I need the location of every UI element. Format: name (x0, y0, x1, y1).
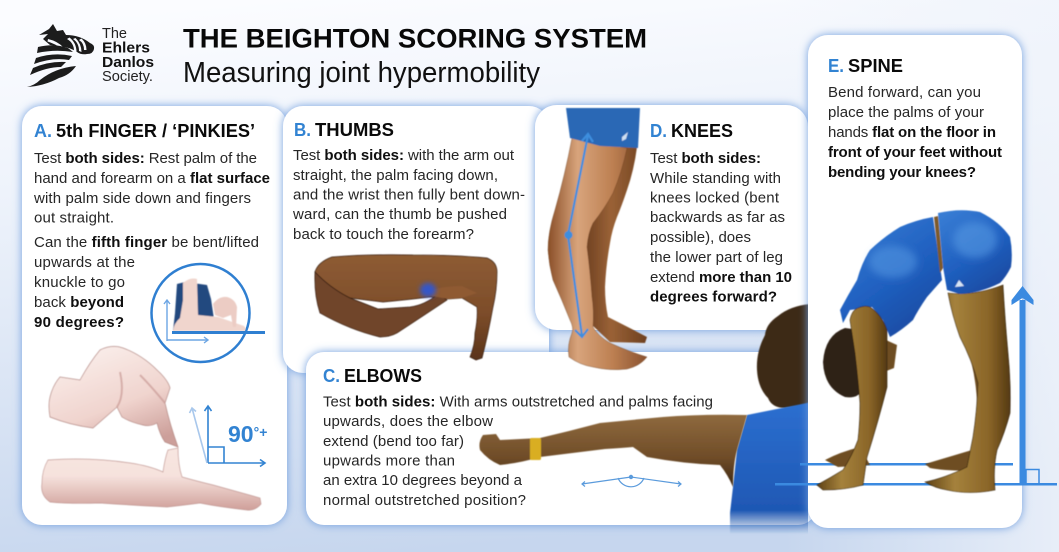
text block: B instructions: Test both sides: with the arm out (293, 147, 515, 164)
text block: D instructions (650, 150, 792, 306)
text block: A instructions (33, 150, 270, 331)
heading: D: KNEES (671, 120, 733, 141)
heading: D: D. (650, 120, 667, 141)
text block: C instructions: upwards more than (323, 452, 455, 470)
text block: E instructions: bending your knees? (828, 164, 976, 181)
text block: B instructions: and the wrist then fully bent down- (293, 186, 525, 204)
forearm (884, 340, 897, 372)
text block: D instructions: backwards as far as (650, 209, 785, 226)
heading: A: 5th FINGER / ‘PINKIES’ (56, 120, 255, 141)
text block: A instructions: Test both sides: Rest palm of the (34, 150, 257, 167)
text block: A instructions: out straight. (34, 210, 114, 226)
panel: E. spine (808, 35, 1022, 528)
icon: 90 degree angle (190, 406, 267, 466)
text block: C instructions: an extra 10 degrees beyond a (323, 472, 523, 489)
front arm and hand (817, 306, 887, 490)
text block: D instructions: While standing with (650, 170, 781, 187)
logo: The Ehlers Danlos Society (27, 24, 154, 87)
text block: A instructions: knuckle to go (34, 274, 125, 291)
illustration: person bending forward (817, 210, 1012, 492)
head (823, 328, 862, 397)
logo: The Ehlers Danlos Society: Danlos (102, 55, 154, 71)
icon: elbow angle (582, 475, 681, 487)
text block: D instructions: degrees forward? (650, 288, 777, 306)
heading: B: B. (294, 119, 311, 140)
illustration: outstretched arm and hand (479, 415, 747, 487)
text block: B instructions: back to touch the forearm? (293, 226, 474, 243)
text block: C instructions (323, 394, 713, 509)
text block: A instructions: 90 degrees? (34, 314, 124, 331)
illustration: woman with outstretched arm (730, 304, 812, 534)
illustration: legs with arrow (548, 108, 647, 370)
icon: circle with person bending finger (152, 264, 265, 362)
logo: The Ehlers Danlos Society: Ehlers (102, 40, 150, 56)
text block: A instructions: with palm side down and fingers (33, 190, 251, 207)
rear hand (825, 447, 870, 467)
illustration: thumb touching forearm (315, 255, 497, 360)
shorts (938, 210, 1012, 294)
heading: C: ELBOWS (344, 365, 422, 386)
heading: E: E. (828, 55, 844, 76)
back leg and foot (925, 330, 1000, 471)
panel: B. thumbs (283, 106, 549, 373)
front leg and foot (925, 285, 1010, 492)
logo: The Ehlers Danlos Society: The (102, 26, 127, 42)
logo: The Ehlers Danlos Society: Society. (102, 69, 153, 85)
icon: zebra head (27, 24, 94, 87)
text block: B instructions: straight, the palm facing down, (293, 167, 498, 184)
heading: E: SPINE (848, 55, 903, 76)
text block: C instructions: Test both sides: With arms outstretched and palms facing (323, 394, 713, 410)
shirt (730, 402, 812, 534)
text block: D instructions: the lower part of leg (650, 249, 783, 266)
icon: 90 degree angle: °+ (254, 424, 267, 440)
text block: E instructions: place the palms of your (828, 104, 984, 121)
illustration: large hand with bent finger (42, 346, 261, 510)
subtitle: Measuring joint hypermobility (183, 57, 541, 89)
text block: B instructions: ward, can the thumb be pushed (292, 206, 507, 223)
heading: C: C. (323, 365, 340, 386)
text block: E instructions: front of your feet without (828, 144, 1002, 161)
panel: C. elbows (306, 352, 816, 525)
heading: B: THUMBS (315, 119, 394, 140)
text block: C instructions: extend (bend too far) (323, 433, 464, 450)
text block: A instructions: Can the fifth finger be bent/lifted (34, 234, 259, 251)
icon: 90 degree angle: 90 (228, 421, 254, 447)
text block: A instructions: back beyond (34, 294, 124, 311)
text block: A instructions: upwards at the (34, 254, 135, 271)
text block: E instructions: Bend forward, can you (828, 84, 981, 101)
text block: C instructions: upwards, does the elbow (323, 413, 493, 430)
text block: D instructions: Test both sides: (650, 150, 761, 167)
title: THE BEIGHTON SCORING SYSTEM (183, 24, 647, 54)
arrows: floor and vertical reference lines (775, 286, 1057, 486)
heading: A: A. (34, 120, 52, 141)
panel: A. 5th finger (22, 106, 287, 525)
arrow: leg alignment (564, 134, 593, 337)
text block: E instructions: hands flat on the floor in (828, 124, 996, 141)
text block: D instructions: extend more than 10 (650, 269, 792, 286)
hair (757, 304, 810, 408)
text block: E instructions (828, 84, 1002, 181)
text block: D instructions: possible), does (650, 229, 751, 246)
text block: C instructions: normal outstretched position? (323, 492, 526, 509)
text block: A instructions: hand and forearm on a flat surface (34, 170, 270, 187)
shirt (840, 217, 942, 337)
text block: D instructions: knees locked (bent (650, 190, 780, 206)
text block: B instructions (292, 147, 525, 243)
panel: D. knees (535, 105, 808, 330)
